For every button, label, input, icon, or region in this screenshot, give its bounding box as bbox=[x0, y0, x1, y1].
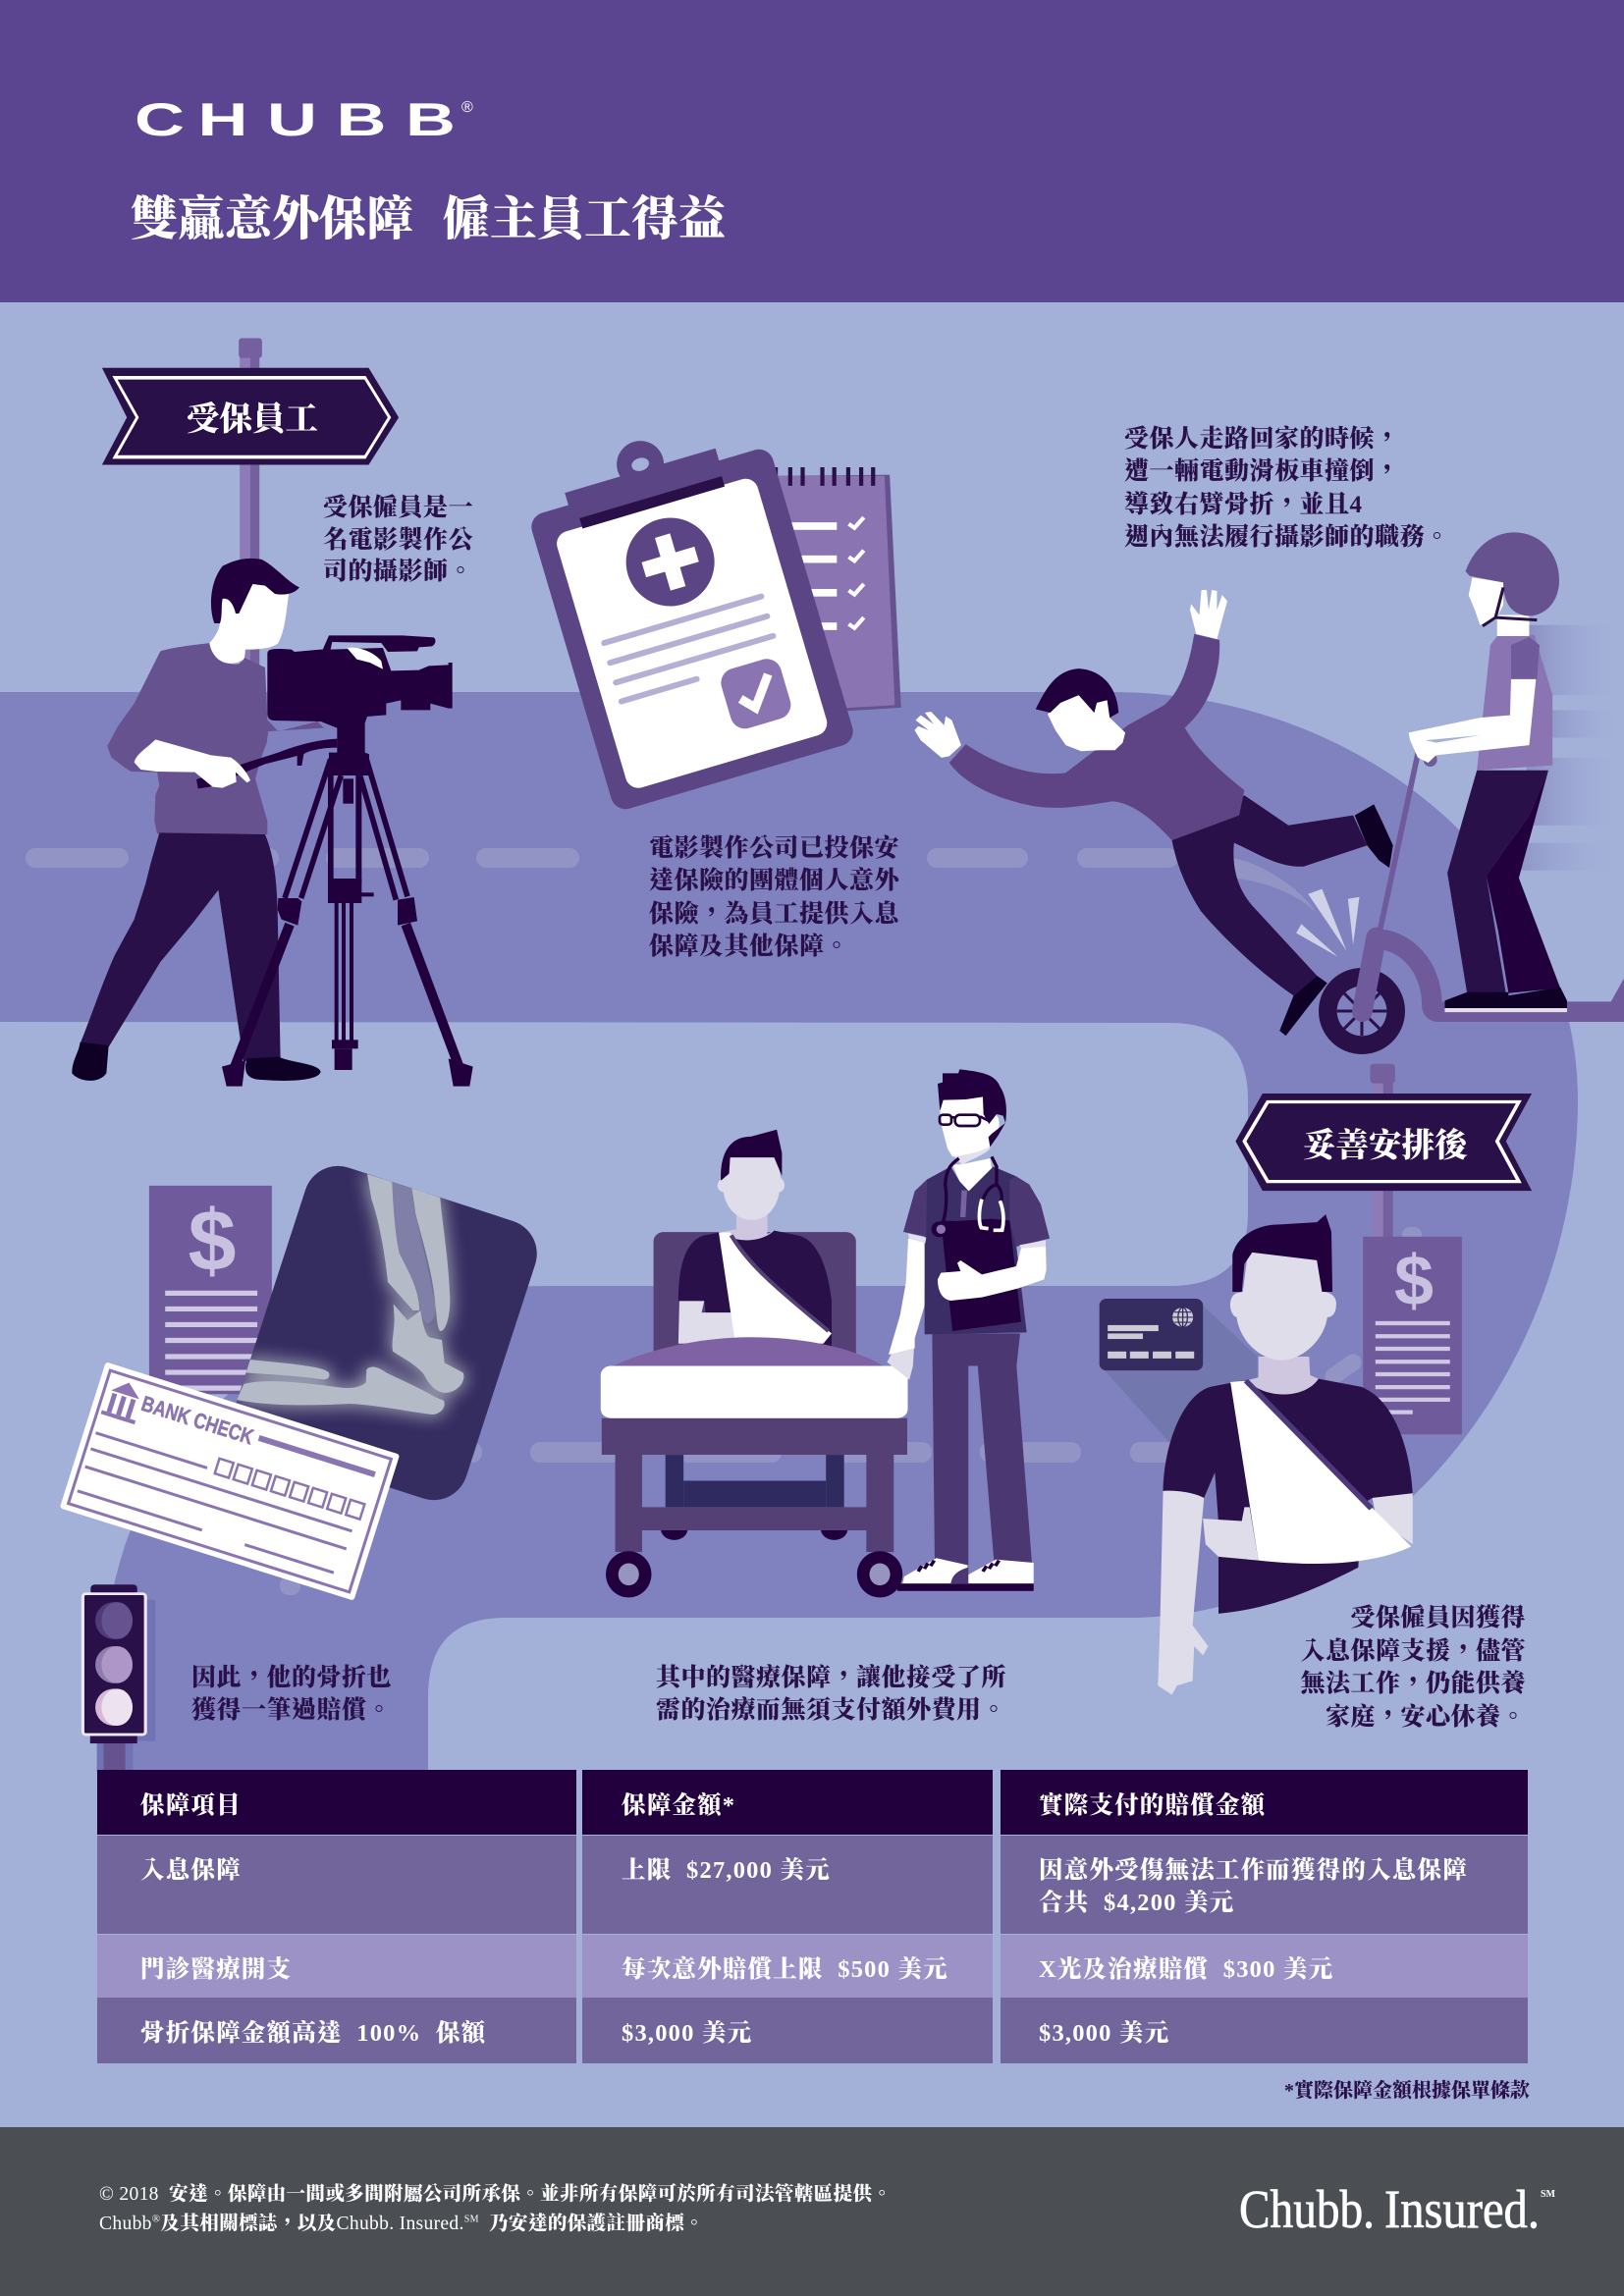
tripod bbox=[222, 754, 473, 1087]
scrubs bbox=[925, 1166, 1027, 1334]
table row: fracture bbox=[97, 1998, 1528, 2063]
text: accident description: 導致右臂骨折，並且4 bbox=[1124, 492, 1363, 518]
camera bbox=[267, 635, 453, 775]
illustration: credit card bbox=[1100, 1299, 1258, 1442]
illustration: second bill: $ bbox=[1394, 1242, 1434, 1320]
mattress bbox=[601, 1365, 908, 1418]
stethoscope bbox=[943, 1156, 1001, 1224]
bed back bbox=[654, 1232, 856, 1371]
text: company policy: 保險，為員工提供入息 bbox=[649, 901, 899, 927]
neck bbox=[952, 1158, 992, 1191]
text: fracture benefit: 獲得一筆過賠償。 bbox=[191, 1697, 392, 1724]
illustration: patient in bed bbox=[601, 1130, 908, 1597]
text: fracture benefit bbox=[191, 1664, 392, 1724]
text: fracture benefit: 因此，他的骨折也 bbox=[191, 1665, 392, 1690]
shirt bbox=[1477, 635, 1552, 771]
forearm bbox=[1203, 1507, 1259, 1561]
table row: outpatient: X光及治療賠償 $300 美元 bbox=[1039, 1956, 1333, 1983]
illustration: second bill bbox=[1363, 1237, 1462, 1434]
head bbox=[940, 1096, 1000, 1156]
text: employee description: 司的攝影師。 bbox=[323, 559, 473, 585]
text: accident description: 週內無法履行攝影師的職務。 bbox=[1124, 524, 1450, 551]
title: 雙贏意外保障 僱主員工得益 bbox=[131, 193, 726, 245]
hands bbox=[914, 590, 1227, 758]
text: income benefit: 受保僱員因獲得 bbox=[1350, 1605, 1526, 1631]
text: income benefit: 家庭，安心休養。 bbox=[1326, 1704, 1526, 1730]
table row: outpatient bbox=[97, 1935, 1528, 1998]
patient head bbox=[718, 1152, 785, 1220]
text: accident description: 遭一輛電動滑板車撞倒， bbox=[1124, 458, 1400, 485]
shoes bbox=[1444, 988, 1567, 1008]
patient body bbox=[720, 1210, 774, 1242]
pan handle bbox=[196, 739, 337, 788]
road dashes bbox=[26, 848, 1422, 1595]
illustration: falling man bbox=[914, 590, 1393, 1036]
text: accident description: 受保人走路回家的時候， bbox=[1124, 426, 1400, 453]
head bbox=[1048, 695, 1125, 751]
text: income benefit: 無法工作，仍能供養 bbox=[1300, 1671, 1526, 1697]
text: employee description bbox=[323, 494, 473, 585]
sign: after arrangement bbox=[1235, 1094, 1532, 1191]
illustration: scooter rider bbox=[1409, 532, 1624, 1012]
text: income benefit: 入息保障支援，儘管 bbox=[1300, 1637, 1526, 1665]
illustration: cameraman with tripod bbox=[72, 559, 473, 1087]
pants bbox=[1172, 795, 1367, 995]
right arm bbox=[1373, 1493, 1413, 1544]
illustration: x-ray film bbox=[236, 1166, 537, 1500]
table row: income: 合共 $4,200 美元 bbox=[1039, 1890, 1234, 1916]
sign text: after arrangement: 妥善安排後 bbox=[1303, 1128, 1467, 1164]
head with helmet bbox=[1497, 615, 1529, 636]
text: employee description: 名電影製作公 bbox=[323, 526, 473, 554]
footer legal text bbox=[99, 2183, 892, 2234]
sign: insured employee bbox=[102, 368, 399, 464]
footer legal text: Chubb®及其相關標誌，以及Chubb. Insured.SM 乃安達的保護註冊商標。 bbox=[99, 2213, 704, 2234]
sign post: insured employee bbox=[239, 338, 262, 665]
illustration: bank check: BANK CHECK bbox=[138, 1391, 256, 1449]
motion streaks bbox=[1527, 625, 1624, 695]
text: company policy bbox=[649, 834, 899, 960]
bank icon bbox=[101, 1377, 146, 1424]
pants bbox=[1447, 771, 1548, 993]
table row: outpatient: 門診醫療開支 bbox=[140, 1956, 292, 1983]
text: medical benefit: 需的治療而無須支付額外費用。 bbox=[656, 1697, 1006, 1724]
arm left bbox=[889, 1239, 926, 1355]
footer logo: Chubb. Insured.: Chubb. bbox=[1239, 2179, 1375, 2239]
road bbox=[0, 692, 1578, 1770]
illustration: scooter bbox=[1319, 749, 1624, 1054]
table: coverage bbox=[97, 1770, 1528, 2063]
footer legal text: © 2018 安達。保障由一間或多間附屬公司所承保。並非所有保障可於所有司法管轄區提供。 bbox=[99, 2184, 892, 2205]
frame bbox=[602, 1418, 907, 1552]
text: accident description bbox=[1124, 425, 1450, 551]
footnote: *實際保障金額根據保單條款 bbox=[1284, 2080, 1530, 2102]
head bbox=[209, 584, 289, 664]
text: medical benefit: 其中的醫療保障，讓他接受了所 bbox=[656, 1665, 1006, 1690]
frame rear bbox=[666, 1455, 683, 1507]
header band bbox=[0, 0, 1624, 302]
logo: CHUBB: ® bbox=[461, 99, 473, 116]
table row: outpatient: 每次意外賠償上限 $500 美元 bbox=[622, 1956, 948, 1983]
table row: income: 入息保障 bbox=[140, 1857, 242, 1884]
text: company policy: 保障及其他保障。 bbox=[649, 934, 849, 960]
left arm bbox=[1158, 1490, 1208, 1695]
illustration: bill with dollar sign bbox=[149, 1186, 272, 1394]
illustration: notebook checklist bbox=[776, 467, 901, 711]
table row: income: 因意外受傷無法工作而獲得的入息保障 bbox=[1039, 1857, 1468, 1884]
blanket bbox=[611, 1337, 885, 1366]
illustration: injured man with sling bbox=[1158, 1214, 1413, 1695]
table header: 保障項目 bbox=[140, 1792, 242, 1819]
text: income benefit bbox=[1300, 1604, 1526, 1730]
shoes bbox=[72, 1042, 109, 1081]
table row: income bbox=[97, 1836, 1528, 1934]
sling bbox=[1230, 1381, 1411, 1564]
text: company policy: 電影製作公司已投保安 bbox=[649, 834, 899, 862]
text: company policy: 達保險的團體個人意外 bbox=[649, 868, 899, 894]
arm bbox=[135, 739, 250, 788]
torso bbox=[107, 643, 324, 834]
legs bbox=[81, 832, 281, 1061]
torso and arms bbox=[949, 634, 1244, 840]
neck bbox=[1246, 1357, 1319, 1397]
shirt bbox=[1164, 1379, 1413, 1614]
clipboard bbox=[941, 1219, 1021, 1331]
table row: fracture: 骨折保障金額高達 100% 保額 bbox=[140, 2020, 486, 2047]
illustration: traffic light bbox=[82, 1584, 155, 1771]
impact lines bbox=[1296, 889, 1359, 956]
illustration: bank check bbox=[60, 1362, 400, 1601]
head bbox=[1230, 1253, 1336, 1361]
illustration: bill with dollar sign: $ bbox=[189, 1192, 236, 1289]
logo: CHUBB: CHUBB bbox=[135, 94, 456, 145]
sign text: insured employee: 受保員工 bbox=[187, 401, 318, 438]
footer band bbox=[0, 2127, 1624, 2296]
text: medical benefit bbox=[656, 1664, 1006, 1724]
table row: fracture: $3,000 美元 bbox=[1039, 2020, 1169, 2047]
text: employee description: 受保僱員是一 bbox=[323, 495, 473, 521]
footer logo: Chubb. Insured.: SM bbox=[1541, 2189, 1556, 2200]
table row: income: 上限 $27,000 美元 bbox=[622, 1857, 831, 1884]
table header bbox=[97, 1770, 1528, 1835]
footer logo: Chubb. Insured.: Insured. bbox=[1384, 2179, 1540, 2239]
arm right bbox=[938, 1247, 1047, 1301]
illustration: medical clipboard bbox=[515, 405, 856, 813]
illustration: doctor bbox=[887, 1069, 1050, 1591]
footer logo: Chubb. Insured. bbox=[1239, 2179, 1556, 2239]
table header: 實際支付的賠償金額 bbox=[1039, 1792, 1266, 1819]
table header: 保障金額* bbox=[622, 1792, 735, 1819]
table row: fracture: $3,000 美元 bbox=[622, 2020, 752, 2047]
arm bbox=[1409, 679, 1536, 763]
sign post: after arrangement bbox=[1371, 1064, 1395, 1239]
